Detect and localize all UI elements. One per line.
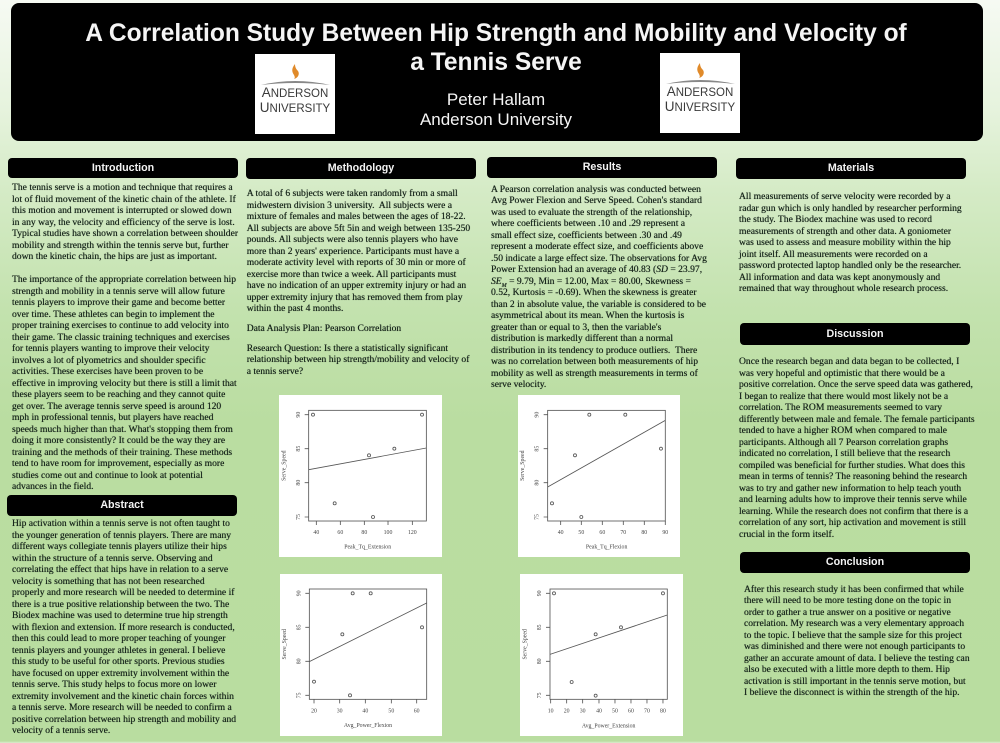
chart: serve speed vs peak torque flexion: Serve_Speed: [520, 450, 526, 481]
heading: discussion: [740, 323, 970, 345]
chart: serve speed vs average power flexion: Serve_Speed: [282, 629, 288, 660]
chart: serve speed vs peak torque extension: 100: [384, 530, 393, 536]
chart: serve speed vs peak torque extension: 120: [408, 530, 417, 536]
heading: conclusion: [740, 552, 970, 573]
chart: serve speed vs average power extension: Avg_Power_Extension: [582, 724, 636, 730]
chart: serve speed vs average power flexion: 50: [389, 709, 395, 715]
chart: serve speed vs peak torque flexion: 80: [641, 530, 647, 536]
chart: serve speed vs average power flexion: 30: [337, 709, 343, 715]
author and affiliation: [420, 90, 572, 129]
chart: serve speed vs peak torque extension: [279, 395, 442, 557]
chart: serve speed vs peak torque extension: Serve_Speed: [282, 450, 288, 481]
panel: conclusion: [740, 552, 970, 698]
chart: serve speed vs peak torque extension: 90: [296, 411, 302, 417]
chart: serve speed vs average power extension: 50: [612, 709, 618, 715]
chart: serve speed vs average power flexion: 90: [297, 591, 303, 597]
chart: serve speed vs average power flexion: Avg_Power_Flexion: [344, 723, 392, 729]
title: A Correlation Study Between Hip Strength and Mobility and Velocity of: [85, 20, 907, 47]
logo: Anderson University left: [255, 54, 335, 134]
chart: serve speed vs average power extension: 75: [537, 693, 543, 699]
chart: serve speed vs peak torque flexion: 90: [662, 530, 668, 536]
chart: serve speed vs average power extension: 20: [564, 709, 570, 715]
chart: serve speed vs average power extension: 60: [628, 709, 634, 715]
text: data analysis plan: Data Analysis Plan: Pearson Correlation: [247, 323, 401, 334]
chart: serve speed vs peak torque flexion: 60: [599, 530, 605, 536]
logo: Anderson University left: ANDERSON: [262, 85, 328, 100]
chart: serve speed vs peak torque extension: Peak_Tq_Extension: [344, 544, 392, 550]
title: a Tennis Serve: [410, 49, 582, 76]
chart: serve speed vs peak torque flexion: 40: [558, 530, 564, 536]
chart: serve speed vs average power extension: 10: [548, 709, 554, 715]
chart: serve speed vs peak torque flexion: 90: [535, 411, 541, 417]
chart: serve speed vs peak torque flexion: 50: [578, 530, 584, 536]
chart: serve speed vs peak torque flexion: 75: [535, 514, 541, 520]
heading: abstract: [7, 495, 237, 516]
chart: serve speed vs average power extension: 80: [537, 659, 543, 665]
panel: discussion: [738, 323, 975, 540]
heading: abstract: Abstract: [100, 499, 144, 511]
chart: serve speed vs average power extension: 30: [580, 709, 586, 715]
chart: serve speed vs average power extension: 70: [644, 709, 650, 715]
text: introduction body: The tennis serve is a motion and technique that requires a lot of fluid movement of the kinetic chain of the athlete. If this motion and movement is interrupted or slowed down in any way, the velocity and efficiency of the serve is lost. Typical studies have shown a correlation between shoulder mobility and strength within the tennis serve but, further down the kinetic chain, the hips are just as important. The importance of the appropriate correlation between hip strength and mobility in a tennis serve will allow future tennis players to improve their game and become better over time. These athletes can begin to implement the proper training exercises to continue to add velocity into their game. The classic training techniques and exercises for tennis players wanting to improve their velocity involves a lot of plyometrics and shoulder specific activities. These exercises have been proven to be effective in improving velocity but there is still a limit that these players seem to be reaching and they cannot quite get over. The average tennis serve speed is around 120 mph in professional tennis, but players have reached speeds much higher than that. What's stopping them from doing it more consistently? It could be the way they are training and the methods of their training. These methods tend to have room for improvement, especially as more studies come out and continue to look at potential advances in the field.: [12, 182, 238, 492]
heading: introduction: [8, 158, 238, 178]
panel: results: [487, 157, 717, 390]
chart: serve speed vs average power flexion: 20: [311, 709, 317, 715]
chart: serve speed vs peak torque extension: 80: [362, 530, 368, 536]
text: conclusion body: After this research study it has been confirmed that while there will need to be more testing done on the topic in order to gather a true answer on a positive or negative correlation. My research was a very elementary approach to the topic. I believe that the sample size for this project was diminished and there were not enough participants to gather an accurate amount of data. I believe the testing can also be executed with a little more depth to them. Hip activation is still important in the tennis serve motion, but I believe the disconnect is within the strength of the hip.: [744, 584, 970, 698]
chart: serve speed vs peak torque extension: 80: [296, 479, 302, 485]
chart: serve speed vs peak torque flexion: 80: [535, 479, 541, 485]
chart: serve speed vs average power flexion: 75: [297, 693, 303, 699]
chart: serve speed vs average power extension: 80: [660, 709, 666, 715]
panel: introduction: [8, 158, 238, 492]
chart: serve speed vs average power extension: 40: [596, 709, 602, 715]
chart: serve speed vs peak torque flexion: [518, 395, 680, 557]
logo: Anderson University right: [660, 53, 740, 133]
chart: serve speed vs average power extension: Serve_Speed: [523, 629, 529, 660]
chart: serve speed vs average power extension: 85: [537, 625, 543, 631]
chart: serve speed vs average power flexion: 40: [363, 709, 369, 715]
title: [85, 20, 907, 76]
heading: materials: [736, 158, 966, 179]
heading: materials: Materials: [828, 162, 874, 174]
chart: serve speed vs average power flexion: [280, 574, 442, 736]
chart: serve speed vs peak torque flexion: Peak_Tq_Flexion: [586, 544, 627, 550]
heading: discussion: Discussion: [826, 328, 884, 340]
chart: serve speed vs peak torque extension: 85: [296, 445, 302, 451]
logo: Anderson University right: ANDERSON: [667, 84, 733, 99]
heading: methodology: [246, 158, 476, 179]
panel: abstract: [7, 495, 237, 736]
heading: results: [487, 157, 717, 178]
panel: materials: [736, 158, 966, 294]
chart: serve speed vs average power extension: [520, 574, 683, 736]
chart: serve speed vs peak torque extension: 75: [296, 514, 302, 520]
text: methodology body: A total of 6 subjects were taken randomly from a small midwestern division 3 university. All subjects were a mixture of females and males between the ages of 18-22. All subjects are above 5ft 5in and weigh between 135-250 pounds. All subjects were also tennis players who have more than 2 years' experience. Participants must have a moderate activity level with reports of 30 min or more of exercise more than twice a week. All participants must have no indication of an upper extremity injury or had an upper extremity injury that has removed them from play within the past 4 months.: [247, 188, 470, 314]
text: discussion body: Once the research began and data began to be collected, I was very hopeful and optimistic that there would be a positive correlation. Once the serve speed data was gathered, I began to realize that there would most likely not be a correlation. The ROM measurements seemed to vary differently between male and female. The female participants tended to have a higher ROM when compared to male participants. Although all 7 Pearson correlation graphs indicated no correlation, I still believe that the research compiled was beneficial for further studies. What does this mean in terms of tennis? The reasoning behind the research was to try and gather new information to help teach youth and learning adults how to improve their tennis serve while learning. While the research does not confirm that there is a correlation of any sort, hip activation and movement is still crucial in the form itself.: [739, 356, 975, 540]
chart: serve speed vs peak torque extension: 40: [314, 530, 320, 536]
chart: serve speed vs average power flexion: 60: [414, 709, 420, 715]
author and affiliation: Peter Hallam: [447, 90, 545, 109]
chart: serve speed vs peak torque flexion: 70: [620, 530, 626, 536]
heading: methodology: Methodology: [328, 162, 394, 174]
heading: results: Results: [583, 161, 621, 173]
text: results body: A Pearson correlation analysis was conducted between Avg Power Flexion and Serve Speed. Cohen's standard was used to evaluate the strength of the relationship, where coefficients between .10 and .29 represent a small effect size, coefficients between .30 and .49 represent a moderate effect size, and coefficients above .50 indicate a large effect size. The observations for Avg Power Extension had an average of 40.83 (SD = 23.97, SEM = 9.79, Min = 12.00, Max = 80.00, Skewness = 0.52, Kurtosis = -0.69). When the skewness is greater than 2 in absolute value, the variable is considered to be asymmetrical about its mean. When the kurtosis is greater than or equal to 3, then the variable's distribution is markedly different than a normal distribution in its tendency to produce outliers. There was no correlation between both measurements of hip mobility as well as strength measurements in terms of serve velocity.: [491, 184, 707, 390]
chart: serve speed vs peak torque extension: 60: [338, 530, 344, 536]
text: research question: Research Question: Is there a statistically significant relationship between hip strength/mobility and velocity of a tennis serve?: [247, 342, 469, 376]
logo: Anderson University left: UNIVERSITY: [260, 100, 330, 115]
chart: serve speed vs average power flexion: 85: [297, 625, 303, 631]
chart: serve speed vs peak torque flexion: 85: [535, 445, 541, 451]
heading: conclusion: Conclusion: [826, 556, 884, 568]
text: abstract body: Hip activation within a tennis serve is not often taught to the younger generation of tennis players. There are many different ways collegiate tennis players utilize their hips within the structure of a tennis serve. Observing and correlating the effect that hips have in relation to a serve velocity is something that has not been researched properly and more research will be needed to determine if there is a true positive relationship between the two. The Biodex machine was used to determine true hip strength with flexion and extension. If more research is conducted, then this could lead to more proper teaching of younger tennis players and younger athletes in general. I believe this study to be useful for other sports. Previous studies have focused on upper extremity involvement within the tennis serve. This study helps to focus more on lower extremity involvement and the kinetic chain forces within a tennis serve. More research will be needed to confirm a positive correlation between hip strength and mobility and velocity of a tennis serve.: [12, 518, 236, 736]
text: materials body: All measurements of serve velocity were recorded by a radar gun which is only handled by researcher performing the study. The Biodex machine was used to record measurements of strength and other data. A goniometer was used to assess and measure mobility within the hip joint itself. All measurements were recorded on a password protected laptop handled only be the researcher. All information and data was kept anonymously and remained that way throughout whole research process.: [739, 191, 962, 294]
author and affiliation: Anderson University: [420, 110, 572, 129]
header banner: [11, 3, 983, 141]
chart: serve speed vs average power flexion: 80: [297, 659, 303, 665]
logo: Anderson University right: UNIVERSITY: [665, 99, 735, 114]
panel: methodology: [246, 158, 476, 376]
heading: introduction: Introduction: [92, 162, 154, 174]
chart: serve speed vs average power extension: 90: [537, 591, 543, 597]
